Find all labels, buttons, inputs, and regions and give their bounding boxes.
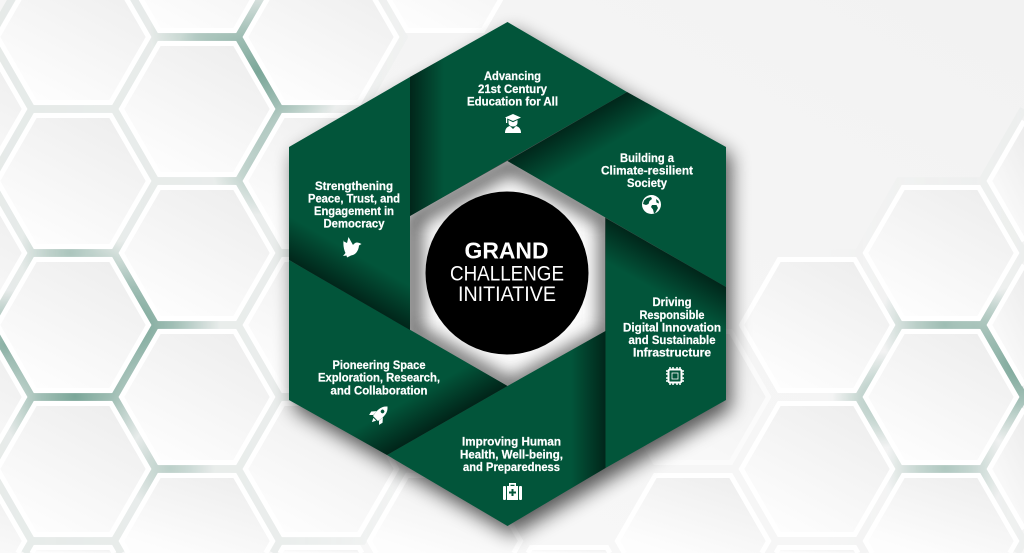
icon: medical case (503, 483, 522, 500)
label: Advancing (484, 71, 541, 83)
label: Building a (620, 153, 675, 165)
centre hexagon opening (410, 161, 608, 389)
panel: Pioneering Space Exploration, Research, and Collaboration (289, 260, 508, 455)
label: Education for All (467, 96, 558, 108)
centre title: INITIATIVE (458, 282, 556, 306)
label: and Sustainable (628, 335, 716, 347)
icon: microchip (666, 367, 684, 385)
icon: dove (343, 237, 362, 258)
main hexagon drop shadow (294, 31, 731, 535)
blade shape (289, 260, 508, 455)
label: Democracy (324, 219, 385, 231)
label: Health, Well-being, (460, 449, 563, 461)
panel: Strengthening Peace, Trust, and Engagement in Democracy (289, 77, 410, 330)
centre title: GRAND (464, 238, 548, 264)
panel: Advancing 21st Century Education for All (410, 22, 627, 216)
panel: Improving Human Health, Well-being, and Preparedness (387, 331, 606, 526)
label: 21st Century (478, 84, 548, 96)
blade shape (508, 92, 726, 287)
label: Responsible (640, 310, 704, 322)
icon: graduate (505, 114, 521, 133)
label: Climate-resilient (601, 166, 693, 178)
blade shape (410, 22, 627, 216)
centre circle (426, 192, 588, 354)
label: Driving (652, 297, 692, 309)
icon: rocket (366, 401, 393, 428)
label: Exploration, Research, (318, 373, 440, 385)
label: Peace, Trust, and (308, 194, 400, 206)
label: Society (627, 178, 668, 190)
blade shape (606, 218, 726, 468)
icon: globe (642, 195, 661, 214)
panel: Building a Climate-resilient Society (508, 92, 726, 287)
label: and Collaboration (330, 385, 428, 397)
blade shape (387, 331, 606, 526)
label: Infrastructure (633, 348, 711, 360)
panel: Driving Responsible Digital Innovation and Sustainable Infrastructure (606, 218, 726, 468)
label: Pioneering Space (332, 360, 426, 372)
label: and Preparedness (463, 462, 560, 474)
centre title: CHALLENGE (450, 262, 564, 286)
blade shape (289, 77, 410, 330)
label: Digital Innovation (623, 323, 721, 335)
label: Strengthening (315, 181, 393, 193)
label: Improving Human (462, 437, 561, 449)
label: Engagement in (314, 206, 394, 218)
